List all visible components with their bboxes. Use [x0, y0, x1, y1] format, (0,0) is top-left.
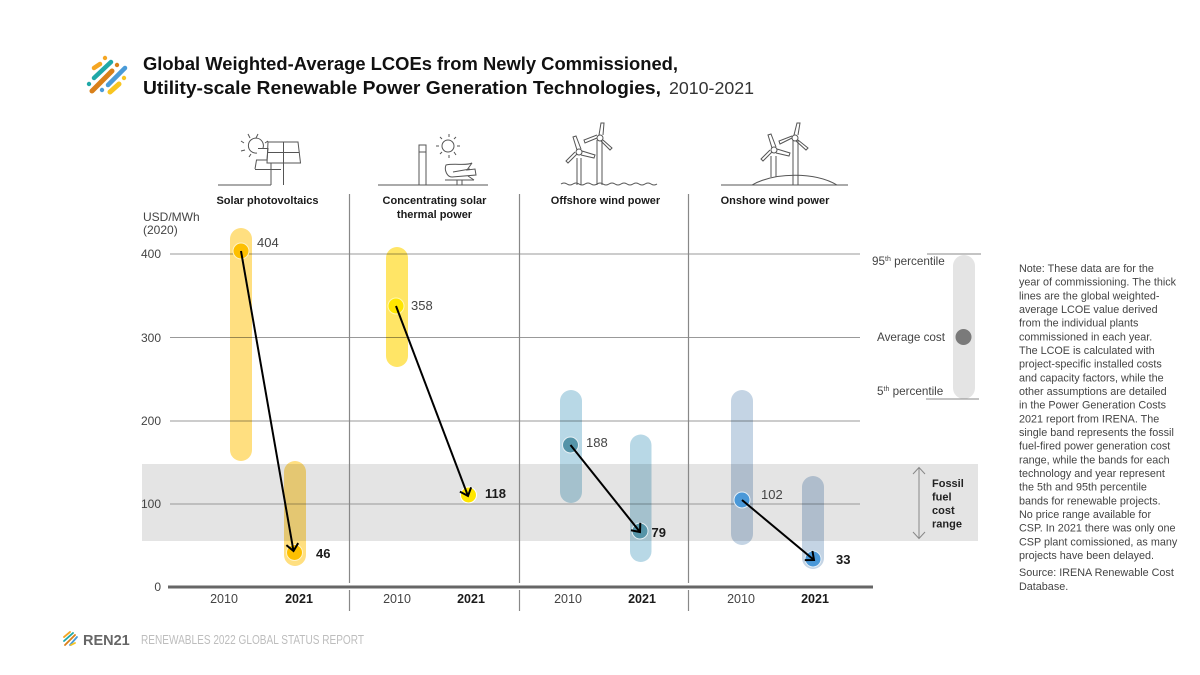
legend: percentile bar: th	[884, 386, 889, 393]
note text: CSP plant comissioned, as many	[1019, 536, 1178, 548]
range bar: offshore wind 2010	[560, 390, 582, 503]
note text	[1019, 263, 1178, 593]
legend: percentile bar	[872, 254, 981, 399]
note text: 2021 report from IRENA. The	[1019, 413, 1159, 425]
note text: other assumptions are detailed	[1019, 386, 1167, 398]
title: 2010-2021	[669, 78, 754, 98]
value labels: 33	[836, 552, 850, 567]
note text: lines are the global weighted-	[1019, 290, 1160, 302]
data point: offshore wind 2010	[562, 437, 578, 453]
y axis labels: 0	[154, 580, 161, 594]
value labels: 79	[652, 525, 666, 540]
data point: solar PV 2010	[233, 243, 249, 259]
range bar: onshore wind 2010	[731, 390, 753, 545]
year labels: 2010	[383, 592, 411, 606]
fossil fuel range arrow and label	[913, 468, 964, 538]
fossil fuel range arrow and label: cost	[932, 505, 955, 517]
year labels	[210, 592, 829, 606]
year labels: 2010	[727, 592, 755, 606]
arrow: solar PV decline	[241, 251, 294, 551]
note text: in the Power Generation Costs	[1019, 400, 1167, 412]
range bar: CSP 2010	[386, 247, 408, 367]
grid lines	[170, 254, 860, 504]
data point: onshore wind 2010	[734, 492, 750, 508]
heading: concentrating solar thermal power: Concentrating solar	[383, 195, 487, 207]
heading: onshore wind power: Onshore wind power	[721, 195, 830, 207]
y axis labels: 200	[141, 414, 161, 428]
note text: Note: These data are for the	[1019, 263, 1154, 275]
note text: The LCOE is calculated with	[1019, 345, 1155, 357]
logo: REN21 mark	[87, 56, 126, 92]
year labels: 2010	[210, 592, 238, 606]
note text: from the individual plants	[1019, 318, 1139, 330]
heading: concentrating solar thermal power: thermal power	[397, 209, 473, 221]
note text: project-specific installed costs	[1019, 359, 1162, 371]
value labels: 102	[761, 487, 783, 502]
icon: offshore wind power	[561, 123, 657, 185]
year labels: 2021	[285, 592, 313, 606]
note text: Source: IRENA Renewable Cost	[1019, 567, 1174, 579]
note text: technology and year represent	[1019, 468, 1165, 480]
y axis labels: 400	[141, 247, 161, 261]
fossil fuel range arrow and label: range	[932, 518, 962, 530]
legend: percentile bar: th	[885, 256, 891, 263]
legend: percentile bar: Average cost	[877, 331, 946, 344]
x axis	[168, 586, 873, 588]
year labels: 2021	[457, 592, 485, 606]
arrow: CSP decline	[396, 306, 468, 496]
heading: concentrating solar thermal power	[383, 195, 487, 221]
fossil fuel range arrow and label: fuel	[932, 492, 952, 504]
range bar: solar PV 2021	[284, 461, 306, 566]
arrow: onshore wind decline	[742, 500, 814, 560]
icon: solar photovoltaics	[218, 134, 300, 185]
heading: solar photovoltaics: Solar photovoltaics	[216, 195, 319, 207]
note text: range, while the bands for each	[1019, 454, 1170, 466]
title	[143, 53, 754, 98]
footer: REN21 logo and report name: RENEWABLES 2022 GLOBAL STATUS REPORT	[141, 633, 364, 647]
data point: solar PV 2021	[286, 544, 302, 560]
value labels	[257, 235, 850, 567]
data point: onshore wind 2021	[805, 551, 821, 567]
icon: concentrating solar thermal power	[378, 134, 488, 185]
data point: offshore wind 2021	[632, 523, 648, 539]
y axis labels: (2020)	[143, 223, 178, 237]
note text: CSP. In 2021 there was only one	[1019, 523, 1175, 535]
note text: bands for renewable projects.	[1019, 495, 1161, 507]
year labels: 2021	[801, 592, 829, 606]
year labels: 2021	[628, 592, 656, 606]
note text: fuel-fired power generation cost	[1019, 441, 1170, 453]
note text: and capacity factors, while the	[1019, 372, 1164, 384]
heading: offshore wind power: Offshore wind power	[551, 195, 661, 207]
note text: Database.	[1019, 581, 1068, 593]
year labels: 2010	[554, 592, 582, 606]
icon: onshore wind power	[721, 123, 848, 185]
data point: CSP 2021	[460, 487, 476, 503]
note text: average LCOE value derived	[1019, 304, 1158, 316]
value labels: 118	[485, 486, 506, 501]
value labels: 46	[316, 546, 330, 561]
note text: the 5th and 95th percentile	[1019, 482, 1147, 494]
footer: REN21 logo and report name	[64, 632, 364, 649]
range bar: offshore wind 2021	[630, 434, 652, 562]
legend: percentile bar: percentile	[891, 255, 945, 268]
note text: year of commissioning. The thick	[1019, 277, 1177, 289]
data point: CSP 2010	[388, 298, 404, 314]
fossil fuel range arrow and label: Fossil	[932, 478, 964, 490]
value labels: 188	[586, 435, 608, 450]
value labels: 358	[411, 298, 433, 313]
value labels: 404	[257, 235, 279, 250]
footer: REN21 logo and report name: REN21	[83, 633, 130, 649]
legend: percentile bar: 5	[877, 385, 884, 398]
legend: percentile bar: percentile	[889, 385, 943, 398]
title: Global Weighted-Average LCOEs from Newly Commissioned,	[143, 53, 678, 74]
note text: No price range available for	[1019, 509, 1151, 521]
arrow: offshore wind decline	[570, 445, 640, 532]
note text: commissioned in each year.	[1019, 331, 1152, 343]
range bar: solar PV 2010	[230, 228, 252, 461]
legend: percentile bar: 95	[872, 255, 885, 268]
column dividers	[350, 194, 688, 611]
y axis labels: 300	[141, 331, 161, 345]
range bar: onshore wind 2021	[802, 476, 824, 569]
y axis labels: USD/MWh	[143, 210, 200, 224]
fossil fuel cost range band	[142, 464, 978, 541]
note text: single band represents the fossil	[1019, 427, 1174, 439]
title: Utility-scale Renewable Power Generation Technologies,	[143, 77, 661, 98]
y axis labels	[141, 210, 200, 594]
y axis labels: 100	[141, 497, 161, 511]
note text: projects have been delayed.	[1019, 550, 1154, 562]
